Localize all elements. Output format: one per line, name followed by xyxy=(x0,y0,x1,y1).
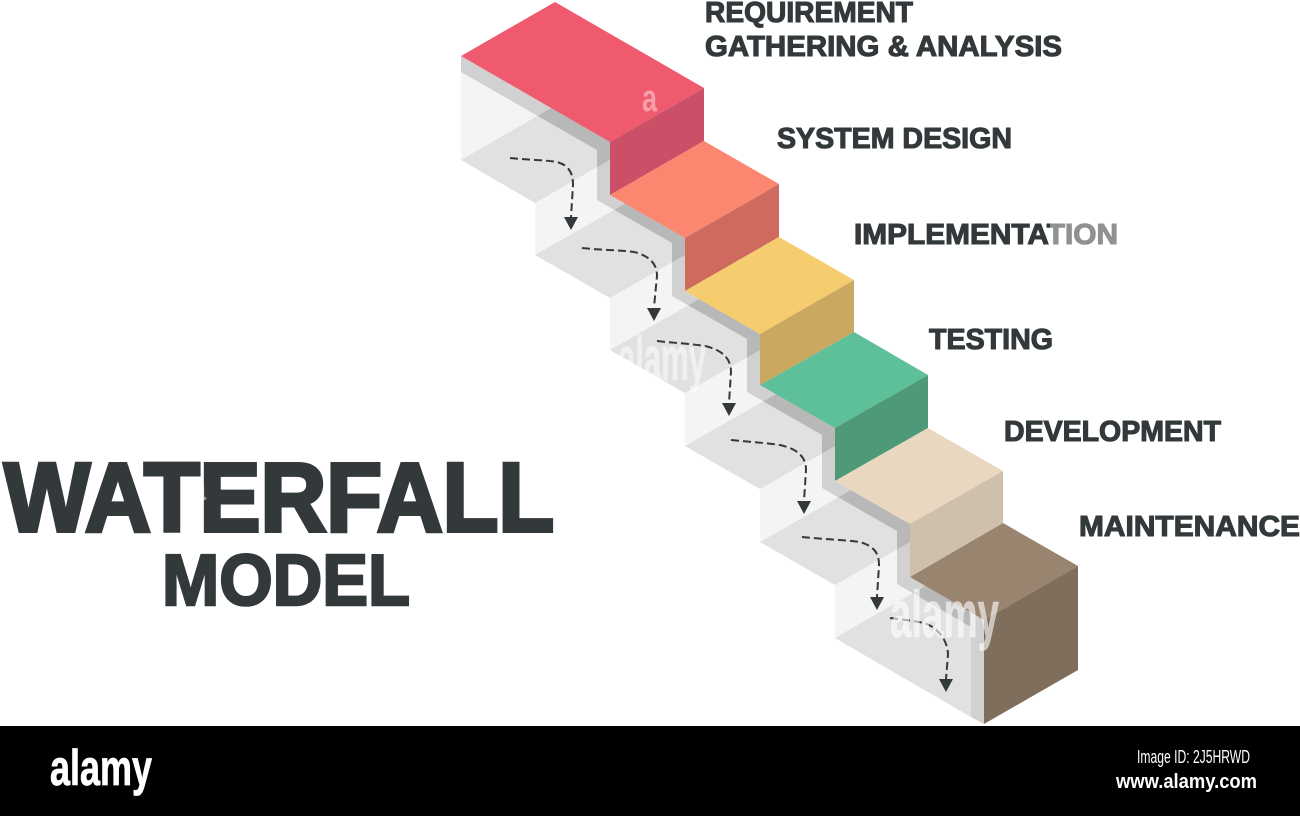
title xyxy=(4,443,554,621)
arrow 3 xyxy=(657,341,736,416)
label: maintenance: MAINTENANCE xyxy=(1079,511,1300,543)
title: WATERFALL xyxy=(4,443,554,552)
footer image id: Image ID: 2J5HRWD xyxy=(1137,747,1250,767)
label: system design: SYSTEM DESIGN xyxy=(777,123,1012,155)
step 5: development block xyxy=(835,428,1003,577)
label: requirement gathering and analysis xyxy=(705,0,1062,63)
footer logo: alamy xyxy=(50,740,152,796)
step 2: system design block xyxy=(610,141,779,291)
arrow 5 xyxy=(802,537,884,610)
step 1: requirement block xyxy=(461,2,704,195)
watermarks xyxy=(618,78,999,651)
step 3: implementation block xyxy=(685,237,854,385)
step 4: testing block xyxy=(760,332,928,481)
footer bar xyxy=(0,726,1300,816)
arrow 6 xyxy=(890,618,953,692)
footer url: www.alamy.com xyxy=(1115,771,1257,793)
label: testing: TESTING xyxy=(929,324,1053,356)
staircase shadow base xyxy=(461,56,984,724)
arrow 1 xyxy=(510,158,578,230)
arrow 2 xyxy=(582,248,661,321)
watermark on title: a xyxy=(191,467,207,508)
title: MODEL xyxy=(162,541,410,621)
step 6: maintenance block xyxy=(910,523,1078,724)
watermarks: alamy xyxy=(618,325,706,394)
label: implementation: IMPLEMENTATION xyxy=(854,219,1118,251)
label: development: DEVELOPMENT xyxy=(1004,416,1221,448)
arrow 4 xyxy=(731,440,811,514)
watermarks: alamy xyxy=(890,577,999,651)
watermarks: a xyxy=(642,78,658,120)
label: requirement gathering and analysis: GATHERING & ANALYSIS xyxy=(705,31,1062,63)
